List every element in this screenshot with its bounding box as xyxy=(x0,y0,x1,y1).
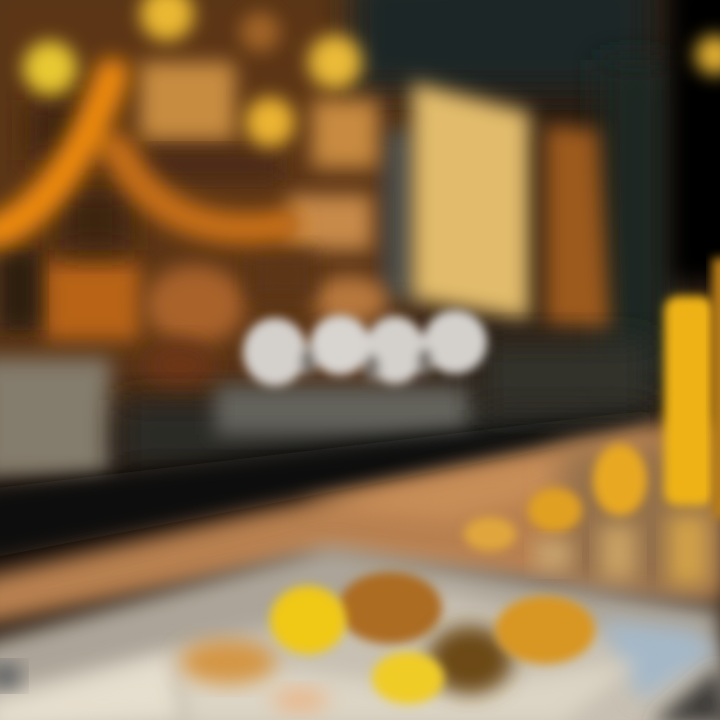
white cluster of coins/cups xyxy=(243,310,487,386)
white paper documents xyxy=(0,545,720,720)
gold bars on paper xyxy=(180,572,595,712)
shelves: glowing goods on the left xyxy=(0,62,388,390)
bright window panels xyxy=(412,82,610,330)
orange ribbon curves xyxy=(0,75,285,232)
grey counter and dark band xyxy=(0,340,650,560)
gold stack on right xyxy=(664,258,720,585)
gold coins on table xyxy=(464,444,647,580)
glowing yellow lights xyxy=(23,0,720,147)
wooden table xyxy=(0,425,720,625)
